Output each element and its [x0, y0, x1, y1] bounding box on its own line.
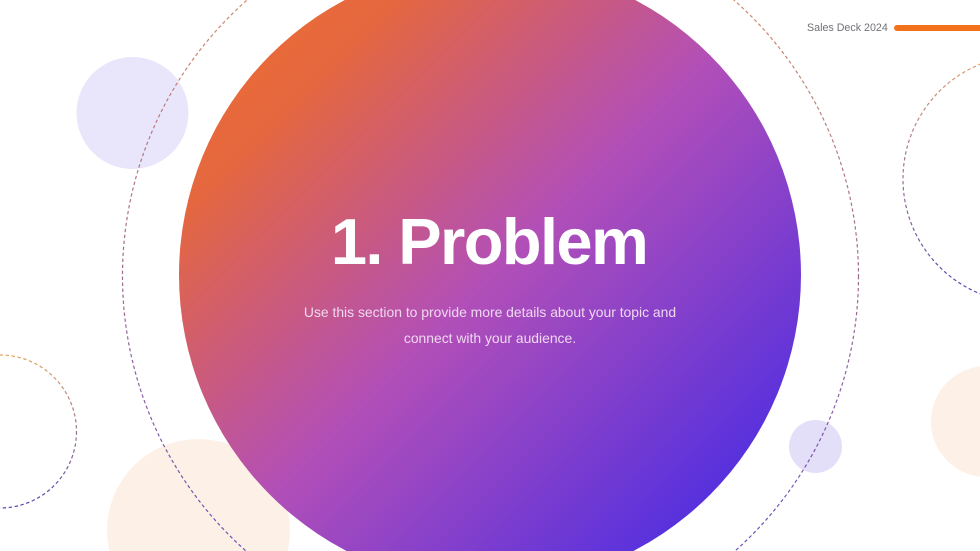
circle: peach bottom left — [107, 439, 290, 551]
dashed ring: large central — [122, 0, 858, 551]
circle: small lavender — [789, 420, 842, 473]
subtitle text: Use this section to provide more details about your topic and — [304, 304, 676, 320]
subtitle text — [304, 304, 676, 346]
title: 1. Problem — [331, 205, 647, 278]
main gradient circle — [179, 0, 801, 551]
header label: Sales Deck 2024 — [807, 22, 888, 34]
header accent bar — [894, 25, 980, 31]
circle: peach right — [931, 366, 980, 477]
circle: lavender top left — [76, 57, 188, 169]
dashed ring: bottom left — [0, 355, 76, 508]
dashed ring: right — [903, 55, 980, 303]
subtitle text: connect with your audience. — [404, 330, 576, 346]
